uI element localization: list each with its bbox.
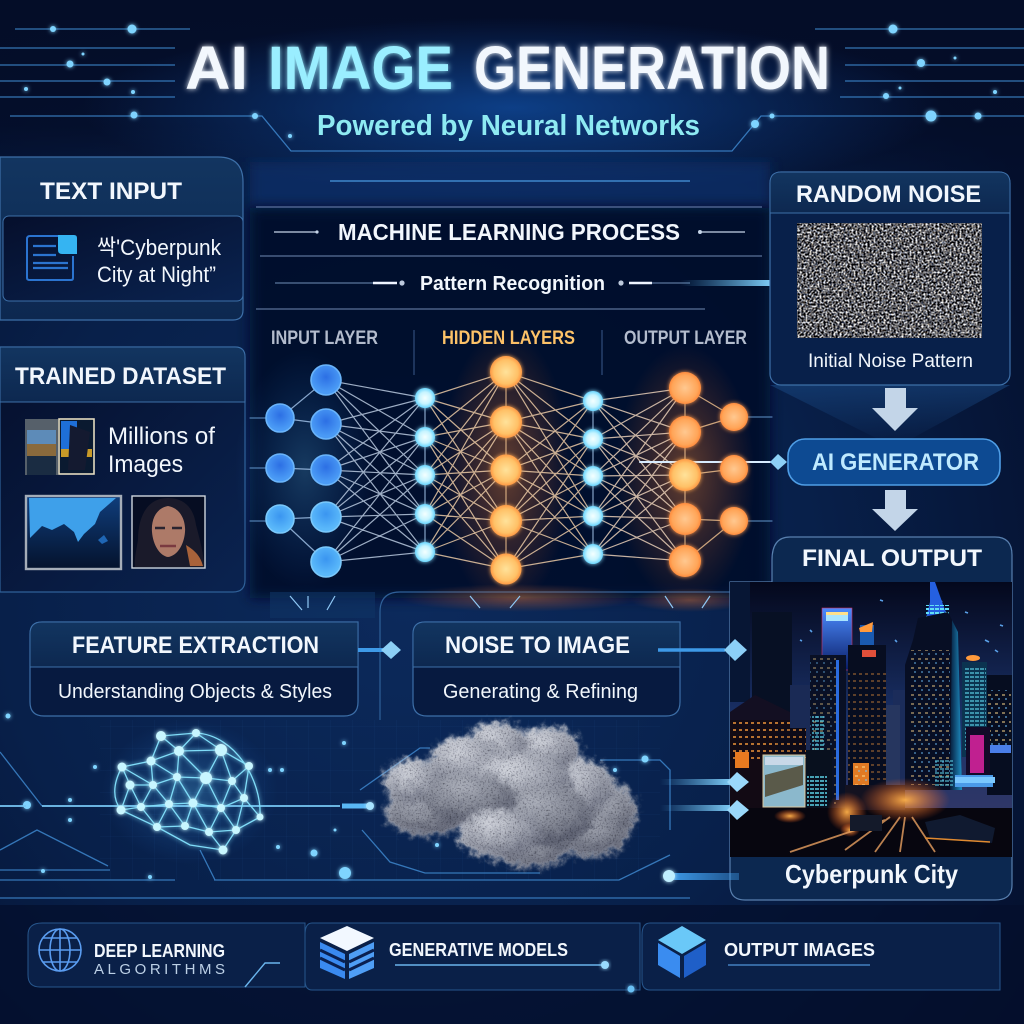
icon: layered stack [320,926,374,979]
caption: generating and refining: Generating & Refining [443,681,638,703]
arrow: feature extraction to noise to image [358,641,401,659]
panel: noise to image [413,622,680,716]
caption: cyberpunk city: Cyberpunk City [785,859,958,889]
neural network diagram [235,330,772,610]
panel: trained dataset [0,347,245,592]
label: pattern recognition: Pattern Recognition [420,273,605,295]
heading: trained dataset: TRAINED DATASET [15,363,226,390]
label: deep learning: DEEP LEARNING [94,941,225,961]
heading: noise to image: NOISE TO IMAGE [445,632,630,659]
input layer nodes [266,365,341,577]
layer labels [271,328,747,375]
layer labels: HIDDEN LAYERS [442,328,575,349]
panel: generative models [305,923,640,992]
heading: text input: TEXT INPUT [40,178,182,205]
subtitle: Powered by Neural Networks [317,110,700,142]
panel: noise-to-image backing frame [270,584,750,720]
pattern recognition connector [275,273,786,295]
heading: feature extraction: FEATURE EXTRACTION [72,632,319,659]
icon: globe [39,929,81,971]
label: millions of images: Millions of [108,423,215,450]
panel: output images [642,923,1000,990]
icon: neural brain [0,720,374,864]
panel: feature extraction [30,622,358,716]
prompt text: 싹'Cyberpunk [97,235,222,260]
AI generator pill: AI GENERATOR [812,449,979,476]
label: algorithms: ALGORITHMS [94,961,225,978]
label: output images: OUTPUT IMAGES [724,940,875,960]
billboard [763,755,805,807]
heading: random noise: RANDOM NOISE [796,181,981,208]
title: AI [185,34,248,102]
center tower [848,645,886,815]
arrow: generator to output [872,490,918,531]
street and lights [730,777,1012,857]
panel: random noise [770,172,1010,445]
layer labels: OUTPUT LAYER [624,328,747,349]
spire tower [905,582,962,790]
caption: initial noise pattern: Initial Noise Pattern [808,351,973,372]
label: generative models: GENERATIVE MODELS [389,940,568,960]
AI generator pill [770,439,1000,485]
hidden layer nodes: cyan [415,388,603,564]
world map image [26,496,121,569]
layer labels: INPUT LAYER [271,328,378,349]
noise image [797,223,982,338]
far buildings [752,612,911,790]
blue crown tower [810,608,852,810]
section rules [256,207,762,309]
low left buildings [730,695,832,815]
image thumbnails [25,419,94,475]
title: IMAGE [268,34,453,102]
panel: text input [0,157,243,320]
icon: document [27,235,77,280]
label line two: Images [108,451,183,478]
section heading: machine learning process: MACHINE LEARNING PROCESS [338,219,680,245]
title [185,34,830,102]
icon: cube [658,926,706,978]
prompt text line two: City at Night” [97,262,216,287]
hidden layer nodes: orange [490,356,522,584]
decorative glowing line [330,180,690,182]
heading: final output: FINAL OUTPUT [802,545,982,572]
glow halos [235,330,755,610]
output layer nodes [669,372,748,577]
connections [250,372,772,569]
arrow: noise to generator [872,388,918,431]
arrow: noise to image to output [658,639,747,661]
caption: objects and styles: Understanding Objects & Styles [58,681,332,703]
city image [730,582,1012,857]
panel: deep learning [28,923,305,987]
right towers [955,655,1012,795]
title: GENERATION [474,34,830,102]
footer bar [28,923,1000,992]
icon: noise cloud [385,724,635,866]
portrait image [132,496,205,568]
panel: final output [730,537,1012,900]
arrows into city image [660,772,749,882]
